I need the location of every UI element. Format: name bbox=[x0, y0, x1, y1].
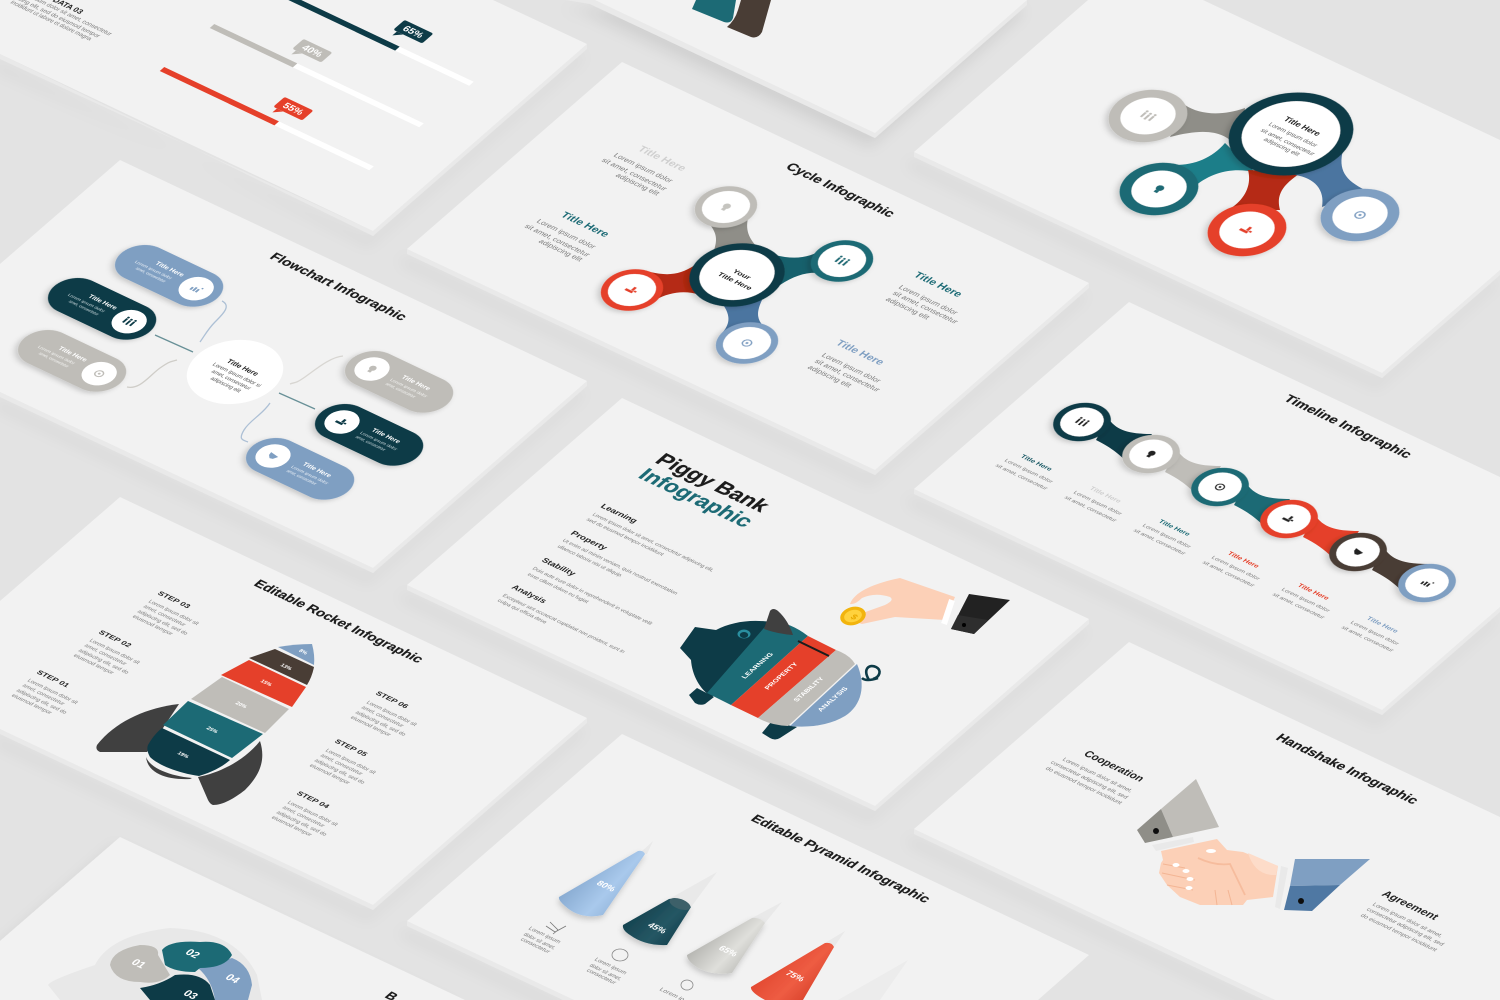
title: Flowchart Infographic bbox=[267, 250, 411, 323]
cooperation text: consectetur adipiscing elit, sed bbox=[1048, 760, 1129, 800]
panel: top right blob slide bbox=[914, 0, 1500, 378]
pill: blue right bbox=[235, 431, 365, 507]
pill: dark right: Lorem ipsum dolor bbox=[359, 431, 399, 451]
cycle diagram bbox=[588, 178, 886, 372]
text: right teal bbox=[883, 271, 964, 325]
step 05: eiusmod tempor bbox=[307, 763, 351, 786]
panel: top left bars slide bbox=[0, 0, 587, 236]
blob diagram: Title Here bbox=[1281, 115, 1324, 138]
text: right teal: Lorem ipsum dolor bbox=[896, 283, 961, 316]
label 6 bbox=[1339, 616, 1400, 653]
step 04: Lorem ipsum dolor sit bbox=[285, 800, 339, 828]
center circle: amet, consectetur bbox=[209, 369, 252, 391]
text: left teal bbox=[522, 211, 611, 263]
text: top gray: adipiscing elit bbox=[613, 171, 663, 197]
data text: incididunt ut labore et dolore magna bbox=[8, 0, 94, 42]
cooperation text: do eiusmod tempor incididunt bbox=[1043, 766, 1123, 806]
caption 2 bbox=[584, 957, 628, 986]
cone 65% bbox=[687, 902, 782, 974]
step 03 bbox=[130, 591, 200, 637]
item: stability: Stability bbox=[539, 556, 578, 578]
head silhouette bbox=[48, 928, 262, 1000]
rocket illustration: 19% bbox=[176, 751, 190, 760]
label 5: Lorem ipsum dolor bbox=[1279, 587, 1331, 614]
step 05: adipiscing elit, sed do bbox=[312, 758, 366, 785]
step 05: Lorem ipsum dolor sit bbox=[323, 748, 377, 776]
title: piggy bank bbox=[633, 450, 774, 531]
pill: gray left: Title Here bbox=[56, 346, 89, 363]
label 3: Lorem ipsum dolor bbox=[1140, 523, 1192, 550]
piece 04 bbox=[198, 958, 252, 1000]
blob diagram: adipiscing elit bbox=[1261, 137, 1301, 158]
step 04: eiusmod tempor bbox=[269, 815, 313, 838]
step 02: eiusmod tempor bbox=[71, 653, 115, 676]
bar 40%: 40% bbox=[298, 43, 325, 59]
rocket illustration: 25% bbox=[205, 726, 219, 735]
rocket illustration: 15% bbox=[259, 679, 273, 688]
center circle bbox=[167, 328, 303, 416]
item: stability: Duis aute irure dolor in reprehenderit in voluptate velit bbox=[530, 566, 654, 627]
step 03: Lorem ipsum dolor sit bbox=[146, 599, 200, 627]
label 1 bbox=[993, 454, 1054, 491]
step 01 bbox=[9, 670, 79, 716]
icon: bulb outline bbox=[681, 980, 693, 990]
center circle: adipiscing elit bbox=[208, 376, 242, 394]
step 04: STEP 04 bbox=[294, 791, 331, 810]
rocket illustration bbox=[96, 644, 314, 805]
step 03: amet, consectetur bbox=[141, 604, 187, 628]
bar 65%: 65% bbox=[399, 24, 426, 40]
pill: dark right: amet, consectetur bbox=[354, 435, 387, 452]
text: right teal: Title Here bbox=[911, 271, 964, 299]
text: right teal: sit amet, consectetur bbox=[890, 289, 961, 325]
step 06: amet, consectetur bbox=[359, 705, 405, 729]
item: learning: sed do eiusmod tempor incididunt bbox=[584, 517, 665, 557]
icon: brain outline bbox=[612, 949, 628, 961]
piggy bank illustration: LEARNING bbox=[740, 652, 775, 680]
step 06: STEP 06 bbox=[373, 691, 410, 710]
bar 55%: 55% bbox=[279, 101, 306, 117]
agreement text: consectetur adipiscing elit, sed bbox=[1364, 907, 1445, 947]
pill: dark left: Lorem ipsum dolor bbox=[67, 293, 107, 313]
agreement text: Agreement bbox=[1379, 889, 1441, 922]
pill: gray right: Lorem ipsum dolor bbox=[389, 378, 429, 398]
piece 03 bbox=[140, 974, 215, 1000]
item: analysis: Excepteur sint occaecat cupidatat non proident, sunt in bbox=[500, 593, 626, 655]
label 1: sit amet, consectetur bbox=[993, 463, 1049, 491]
step 03: STEP 03 bbox=[155, 591, 192, 610]
caption 2: consectetur bbox=[584, 968, 617, 986]
label 1: Title Here bbox=[1018, 454, 1054, 473]
step 06: eiusmod tempor bbox=[348, 715, 392, 738]
text: bottom blue: sit amet, consectetur bbox=[812, 357, 883, 393]
cone 75%: 75% bbox=[783, 969, 807, 983]
label 5 bbox=[1270, 583, 1331, 620]
title: Editable Rocket Infographic bbox=[251, 577, 427, 665]
text: top gray: sit amet, consectetur bbox=[599, 156, 670, 192]
step 04: adipiscing elit, sed do bbox=[274, 810, 328, 837]
text: left teal: Title Here bbox=[558, 211, 611, 239]
agreement text: Lorem ipsum dolor sit amet, bbox=[1370, 902, 1444, 939]
step 01: adipiscing elit, sed do bbox=[14, 688, 68, 715]
panel: rocket slide bbox=[0, 497, 587, 910]
step 03: eiusmod tempor bbox=[130, 614, 174, 637]
piece 01: 01 bbox=[128, 957, 148, 971]
cone 80% bbox=[559, 841, 653, 916]
cycle diagram: Your bbox=[730, 269, 752, 281]
label 2 bbox=[1062, 486, 1123, 523]
panel: handshake slide bbox=[914, 642, 1500, 1000]
cooperation text: Lorem ipsum dolor sit amet, bbox=[1060, 757, 1134, 794]
rocket illustration: 13% bbox=[279, 663, 293, 672]
caption 2: dolor sit amet, bbox=[587, 963, 623, 982]
pill: blue top: amet, consectetur bbox=[134, 266, 168, 283]
caption 1: dolor sit amet, bbox=[521, 932, 557, 951]
pill: dark left: Title Here bbox=[86, 294, 119, 311]
step 06 bbox=[348, 691, 418, 738]
label 5: Title Here bbox=[1295, 583, 1331, 602]
text: top gray: Title Here bbox=[635, 145, 688, 173]
pill: dark right: Title Here bbox=[370, 427, 402, 445]
text: bottom blue: adipiscing elit bbox=[805, 363, 855, 389]
agreement text bbox=[1358, 889, 1445, 953]
title: Timeline Infographic bbox=[1281, 392, 1416, 461]
item: property: ullamco laboris nisi ut aliquip. bbox=[555, 544, 625, 579]
label 2: Lorem ipsum dolor bbox=[1071, 490, 1123, 517]
label 6: Title Here bbox=[1364, 616, 1400, 635]
caption 1: Lorem ipsum bbox=[526, 926, 562, 945]
piece 02 bbox=[162, 942, 232, 972]
label 5: sit amet, consectetur bbox=[1270, 592, 1326, 620]
text: left teal: adipiscing elit bbox=[536, 237, 586, 263]
cooperation text: Cooperation bbox=[1081, 749, 1147, 784]
title: Cycle Infographic bbox=[783, 160, 899, 220]
text: top gray: Lorem ipsum dolor bbox=[611, 151, 676, 184]
piggy bank illustration: ANALYSIS bbox=[816, 686, 851, 713]
step 04: amet, consectetur bbox=[280, 805, 326, 829]
item: property: Ut enim ad minim veniam, quis nostrud exercitation bbox=[560, 538, 679, 596]
panel: cycle slide bbox=[407, 62, 1089, 475]
center circle: Lorem ipsum dolor si bbox=[210, 362, 262, 389]
cone 65%: 65% bbox=[716, 944, 740, 958]
cone 45%: 45% bbox=[645, 921, 669, 935]
text: bottom blue: Lorem ipsum dolor bbox=[819, 351, 884, 384]
piece 01 bbox=[110, 945, 170, 983]
step 02: amet, consectetur bbox=[82, 643, 128, 667]
bar 65% bbox=[278, 0, 474, 86]
bar 40% bbox=[210, 24, 424, 127]
panel: timeline slide bbox=[914, 302, 1500, 715]
step 04 bbox=[269, 791, 339, 838]
caption 2: Lorem ipsum bbox=[592, 957, 628, 976]
connectors bbox=[127, 301, 343, 442]
label 4: Title Here bbox=[1225, 551, 1261, 570]
cycle fragment bbox=[692, 0, 771, 37]
step 02: Lorem ipsum dolor sit bbox=[87, 638, 141, 666]
label 4: sit amet, consectetur bbox=[1200, 560, 1256, 588]
step 05: STEP 05 bbox=[332, 739, 369, 758]
text: right teal: adipiscing elit bbox=[883, 295, 933, 321]
pill: gray left: amet, consectetur bbox=[37, 351, 71, 368]
pill: gray right: amet, consectetur bbox=[384, 382, 417, 399]
step 02: adipiscing elit, sed do bbox=[76, 648, 130, 675]
pill: dark left: amet, consectetur bbox=[67, 299, 101, 316]
label 3: Title Here bbox=[1156, 519, 1192, 538]
step 02 bbox=[71, 630, 141, 676]
panel: top center slide bbox=[566, 0, 1027, 138]
step 01: STEP 01 bbox=[34, 670, 71, 689]
panel: brain slide bbox=[0, 837, 465, 1000]
item: analysis: Analysis bbox=[509, 583, 549, 605]
agreement text: do eiusmod tempor incididunt bbox=[1358, 913, 1438, 953]
pill: gray left: Lorem ipsum dolor bbox=[37, 345, 77, 365]
step 01: Lorem ipsum dolor sit bbox=[25, 678, 79, 706]
label 4 bbox=[1200, 551, 1261, 588]
blob diagram bbox=[1092, 77, 1416, 266]
text: left teal: sit amet, consectetur bbox=[522, 222, 593, 258]
title: piggy bank: Piggy Bank bbox=[650, 450, 774, 516]
center circle: Title Here bbox=[224, 357, 261, 377]
piece 02: 02 bbox=[182, 947, 202, 961]
pill: gray right: Title Here bbox=[400, 374, 432, 392]
piggy bank illustration: PROPERTY bbox=[763, 661, 801, 691]
pill: blue right: amet, consectetur bbox=[285, 469, 318, 486]
panel: piggy bank slide bbox=[407, 398, 1089, 811]
pill: dark left bbox=[37, 271, 167, 347]
text: left teal: Lorem ipsum dolor bbox=[534, 217, 599, 250]
step 05 bbox=[307, 739, 377, 786]
panel: flowchart slide bbox=[0, 160, 587, 573]
caption 1 bbox=[518, 926, 562, 955]
pill: blue right: Title Here bbox=[301, 461, 333, 479]
label 4: Lorem ipsum dolor bbox=[1209, 555, 1261, 582]
title: Handshake Infographic bbox=[1273, 731, 1422, 806]
hand with coin bbox=[838, 578, 1010, 634]
cone 5 spike bbox=[838, 960, 908, 1000]
item: analysis: culpa qui officia dese bbox=[495, 598, 548, 625]
item: property: Property bbox=[568, 529, 610, 552]
text: bottom blue: Title Here bbox=[833, 339, 886, 367]
step 03: adipiscing elit, sed do bbox=[135, 609, 189, 636]
piggy bank illustration: STABILITY bbox=[792, 676, 826, 703]
title: Editable Pyramid Infographic bbox=[748, 812, 934, 905]
label 1: Lorem ipsum dolor bbox=[1002, 458, 1054, 485]
step 02: STEP 02 bbox=[96, 630, 133, 649]
caption 1: consectetur bbox=[518, 937, 551, 955]
handshake illustration bbox=[1137, 779, 1370, 911]
cone 80%: 80% bbox=[594, 879, 618, 893]
cycle diagram: Title Here bbox=[715, 272, 753, 292]
piece 04: 04 bbox=[222, 972, 243, 986]
pill: blue top: Lorem ipsum dolor bbox=[134, 260, 174, 280]
label 3 bbox=[1131, 519, 1192, 556]
piggy bank illustration bbox=[680, 609, 880, 740]
label 3: sit amet, consectetur bbox=[1131, 528, 1187, 556]
blob diagram: sit amet, consectetur bbox=[1258, 128, 1317, 157]
step 05: amet, consectetur bbox=[318, 753, 364, 777]
text: bottom blue bbox=[805, 339, 886, 393]
label 6: sit amet, consectetur bbox=[1339, 625, 1395, 653]
bar 55% bbox=[160, 67, 374, 170]
pill: dark right bbox=[304, 397, 434, 473]
pill: blue top bbox=[104, 238, 234, 314]
item: learning: Learning bbox=[598, 502, 640, 525]
item: stability: esse cillum dolore eu fugiat bbox=[525, 572, 590, 605]
panel: pyramid slide bbox=[407, 734, 1089, 1000]
blob diagram: Lorem ipsum dolor bbox=[1266, 122, 1319, 149]
pill: gray left bbox=[7, 323, 137, 399]
label 2: Title Here bbox=[1087, 486, 1123, 505]
step 06: Lorem ipsum dolor sit bbox=[364, 700, 418, 728]
cooperation text bbox=[1043, 749, 1147, 806]
pill: blue right: Lorem ipsum dolor bbox=[290, 465, 330, 485]
cone 45% bbox=[623, 872, 717, 945]
rocket illustration: 20% bbox=[234, 701, 248, 710]
timeline chain bbox=[1041, 395, 1468, 610]
label 6: Lorem ipsum dolor bbox=[1348, 620, 1400, 647]
text: top gray bbox=[599, 145, 688, 197]
step 06: adipiscing elit, sed do bbox=[353, 710, 407, 737]
pill: blue top: Title Here bbox=[153, 261, 186, 278]
step 01: eiusmod tempor bbox=[9, 693, 53, 716]
cone 75% bbox=[751, 931, 845, 1000]
icon: handshake outline bbox=[546, 922, 566, 934]
step 01: amet, consectetur bbox=[20, 683, 66, 707]
rocket illustration: 8% bbox=[297, 649, 309, 656]
pill: gray right bbox=[334, 344, 464, 420]
title: piggy bank: Infographic bbox=[633, 465, 758, 531]
label 2: sit amet, consectetur bbox=[1062, 495, 1118, 523]
hand with coin: $ bbox=[848, 613, 860, 621]
item: learning: Lorem ipsum dolor sit amet, consectetur adipiscing elit, bbox=[590, 512, 716, 573]
